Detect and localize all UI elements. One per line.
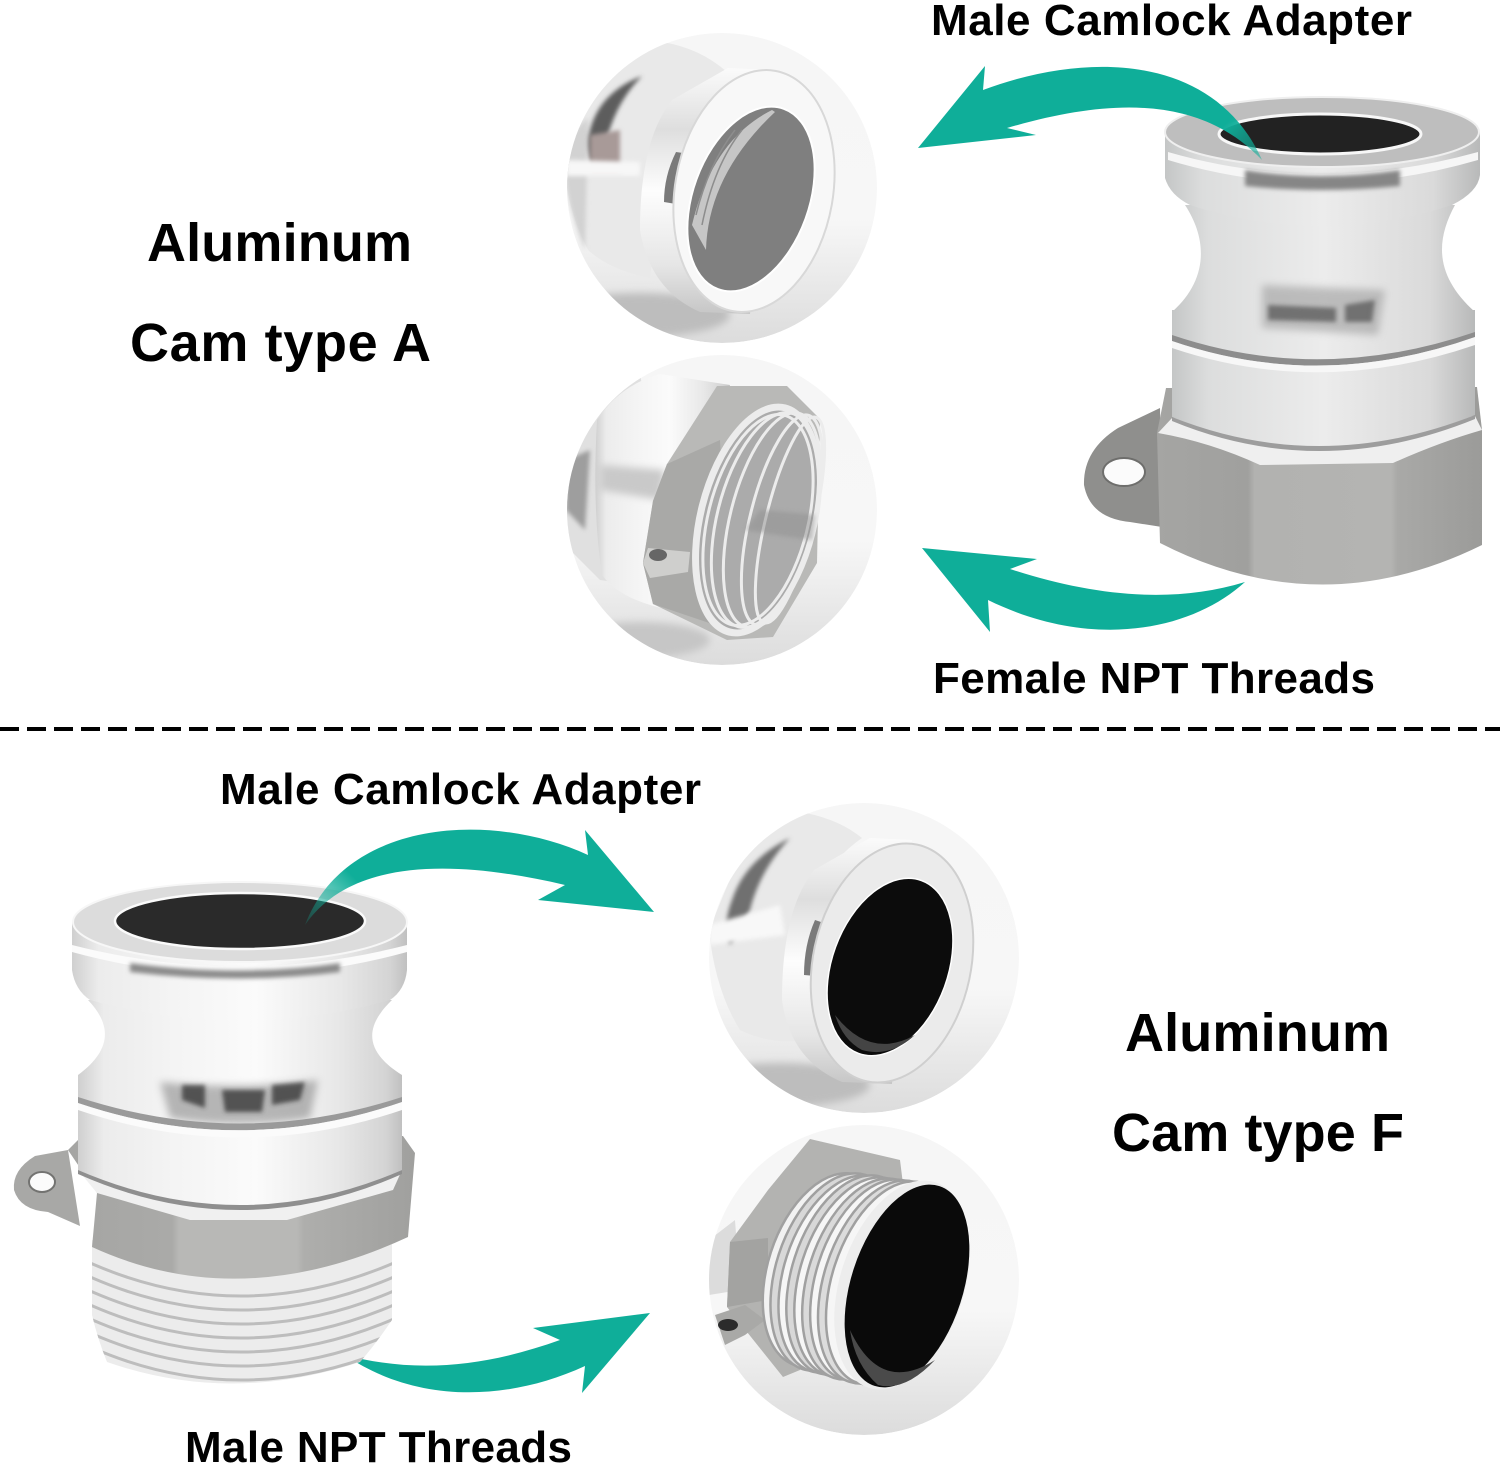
- detail photo: type A female threads: [560, 355, 877, 665]
- hex collar: [68, 1136, 415, 1279]
- waist: [78, 1000, 402, 1112]
- label: Female NPT Threads: Female NPT Threads: [933, 654, 1375, 703]
- top face: [1165, 97, 1479, 167]
- heading: Aluminum: Aluminum: [147, 213, 412, 273]
- arrow: Male NPT Threads: [345, 1313, 650, 1393]
- heading: Cam type A: Cam type A: [130, 313, 431, 373]
- heading: Cam type F: Cam type F: [1112, 1103, 1404, 1163]
- polished bevel: [1158, 416, 1482, 465]
- panel: Cam type F title: [1112, 1003, 1404, 1163]
- fitting: Cam type F main photo: [14, 882, 415, 1384]
- panel: Cam type A title: [130, 213, 431, 373]
- flange: [1165, 132, 1480, 226]
- waist: [1172, 205, 1475, 348]
- waist reflection: [1262, 285, 1385, 335]
- top face: [73, 882, 407, 962]
- waist reflection: [160, 1080, 318, 1124]
- label: Male Camlock Adapter (bottom): Male Camlock Adapter: [220, 765, 701, 814]
- bore: [115, 893, 365, 949]
- arrow: Male Camlock Adapter (bottom): [305, 830, 654, 925]
- male threads: [92, 1240, 392, 1384]
- ear lug: [14, 1150, 80, 1226]
- flange: [72, 922, 407, 1021]
- lower barrel: [1172, 310, 1475, 447]
- ear lug: [1084, 408, 1162, 527]
- detail photo: type A camlock end: [550, 33, 877, 343]
- ear hole: [1103, 458, 1145, 486]
- ear hole: [29, 1172, 55, 1192]
- arrow: Female NPT Threads: [922, 548, 1245, 632]
- hex collar: [1157, 387, 1482, 585]
- polished bevel: [78, 1170, 402, 1220]
- arrow: Male Camlock Adapter (top): [918, 66, 1262, 160]
- detail photo: type F camlock end: [690, 803, 1019, 1113]
- heading: Aluminum: Aluminum: [1125, 1003, 1390, 1063]
- bore: [1219, 114, 1421, 154]
- lower barrel: [78, 1075, 402, 1205]
- divider: dashed line between the two types: [0, 727, 1500, 731]
- fitting: Cam type A main photo: [1084, 97, 1482, 585]
- detail photo: type F male threads: [709, 1125, 1019, 1435]
